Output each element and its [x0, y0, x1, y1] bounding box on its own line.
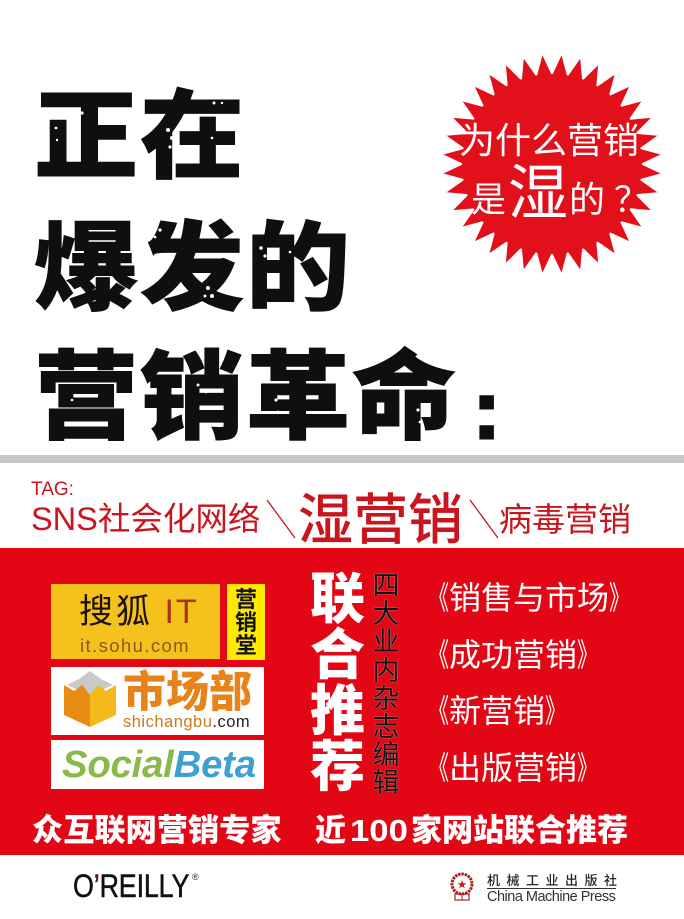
logo: sohu IT: it.sohu.com	[80, 635, 190, 656]
logo: sohu IT: 搜狐 IT	[79, 593, 199, 631]
text: four magazine editors: 四	[372, 571, 400, 601]
logo url: shichangbu.com	[123, 713, 250, 731]
badge text line 2: 湿	[508, 160, 568, 227]
text: four magazine editors: 志	[372, 712, 400, 742]
logo: marketing hall: 堂	[235, 633, 257, 658]
badge text line 2	[471, 160, 649, 227]
text: four magazine editors: 内	[372, 656, 400, 686]
tag: wet marketing: 湿营销	[298, 489, 463, 551]
text: four magazine editors: 辑	[372, 768, 400, 798]
magazine 2: 成功营销	[449, 637, 577, 673]
logo: shichangbu	[51, 667, 264, 735]
title line 3: 营销革命	[34, 344, 458, 452]
magazine 1: 《	[428, 580, 449, 616]
badge text line 1: 为什么营销	[459, 120, 639, 161]
title colon: :	[473, 365, 500, 456]
magazine 3: 新营销	[449, 693, 545, 729]
badge text line 2: 的	[569, 179, 605, 220]
tag: viral marketing: 病毒营销	[499, 501, 631, 538]
registered mark: ®	[192, 872, 199, 882]
heading: joint recommendation: 推	[310, 680, 365, 742]
starburst badge	[444, 56, 660, 272]
panel: red recommendation band	[0, 548, 684, 855]
logo: marketing hall: 销	[235, 610, 257, 635]
magazine 2: 》	[577, 637, 598, 673]
magazine list	[428, 580, 630, 786]
title line 2: 爆发的	[34, 215, 352, 323]
magazine 2: 《	[428, 637, 449, 673]
badge text line 2: ？	[614, 181, 649, 220]
logo: SocialBeta: SocialBeta	[62, 743, 256, 786]
title line 1: 正在	[34, 83, 246, 191]
logo: marketing hall	[227, 584, 265, 660]
logo: sohu IT	[51, 584, 220, 659]
tag: SNS: SNS社会化网络	[31, 501, 260, 537]
logo: marketing hall: 营	[235, 587, 257, 612]
magazine 4: 出版营销	[449, 750, 577, 786]
text: four magazine editors: 大	[372, 599, 400, 629]
heading: joint recommendation: 合	[310, 624, 365, 686]
text: 100 sites: 100	[350, 813, 408, 848]
tag label: TAG:	[31, 479, 74, 500]
tag row	[31, 479, 631, 551]
title: headline	[34, 83, 500, 456]
text: four magazine editors: 杂	[372, 684, 400, 714]
text: four magazine editors: 编	[372, 740, 400, 770]
magazine 3: 《	[428, 693, 449, 729]
badge text line 2: 是	[471, 181, 506, 220]
slash 1	[266, 500, 296, 538]
magazine 3: 》	[545, 693, 566, 729]
grey divider band	[0, 455, 684, 463]
rule	[487, 888, 616, 889]
icon: publisher emblem	[450, 872, 474, 901]
magazine 4: 《	[428, 750, 449, 786]
icon: MM cube	[64, 671, 116, 727]
heading: joint recommendation	[310, 568, 365, 798]
slash 2	[470, 500, 498, 538]
magazine 1: 》	[609, 580, 630, 616]
publisher english: China Machine Press	[487, 889, 615, 905]
magazine 1: 销售与市场	[449, 580, 609, 616]
logo: O'Reilly: O’REILLY	[73, 868, 189, 904]
heading: joint recommendation: 联	[310, 568, 365, 630]
magazine 4: 》	[577, 750, 598, 786]
heading: joint recommendation: 荐	[310, 736, 365, 798]
magazine 3	[428, 693, 566, 729]
publisher name	[487, 873, 624, 905]
publisher chinese: 机械工业出版社	[487, 873, 624, 888]
text: four magazine editors: 业	[372, 627, 400, 657]
text: four magazine editors	[372, 571, 400, 798]
text: 100 sites: 近 家网站联合推荐	[315, 813, 628, 848]
text: experts: 众互联网营销专家	[32, 813, 282, 848]
logo text: 市场部	[123, 669, 252, 717]
